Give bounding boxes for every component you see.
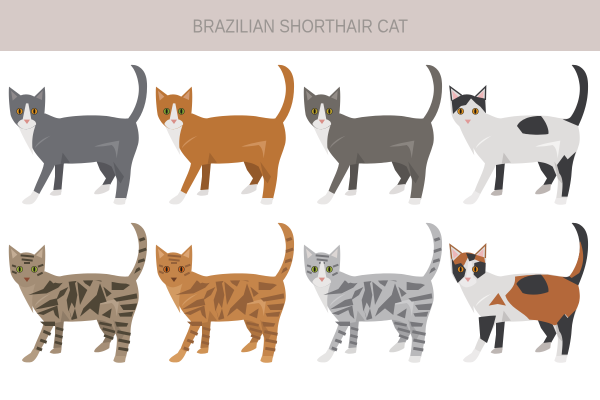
orange body patch: [505, 275, 580, 325]
ear rims: [450, 87, 486, 101]
cat: white with black patches: [450, 65, 588, 205]
title banner: [0, 0, 600, 51]
cat: orange with white chest: [156, 65, 294, 205]
black head cap: [452, 94, 486, 114]
tail: [563, 223, 588, 285]
black front leg patch: [479, 316, 496, 343]
cat: brown tabby: [9, 223, 147, 363]
white blaze: [460, 261, 476, 287]
head black cheeks: [452, 253, 486, 283]
cat: silver tabby: [304, 223, 442, 363]
cat: calico: [450, 223, 588, 363]
cat: orange tabby: [156, 223, 294, 363]
back patch: [517, 116, 548, 135]
ear rims: [450, 245, 486, 259]
orange inner tail: [569, 241, 583, 278]
black back patch: [516, 275, 548, 295]
black rear leg: [557, 152, 576, 197]
cat: taupe with white chest: [304, 65, 442, 205]
cat: gray with white chest: [9, 65, 147, 205]
black rear leg: [557, 310, 576, 355]
orange shoulder patch: [489, 293, 506, 306]
head orange cap: [453, 252, 486, 273]
black tail: [563, 65, 588, 126]
title: BRAZILIAN SHORTHAIR CAT: [192, 16, 408, 36]
